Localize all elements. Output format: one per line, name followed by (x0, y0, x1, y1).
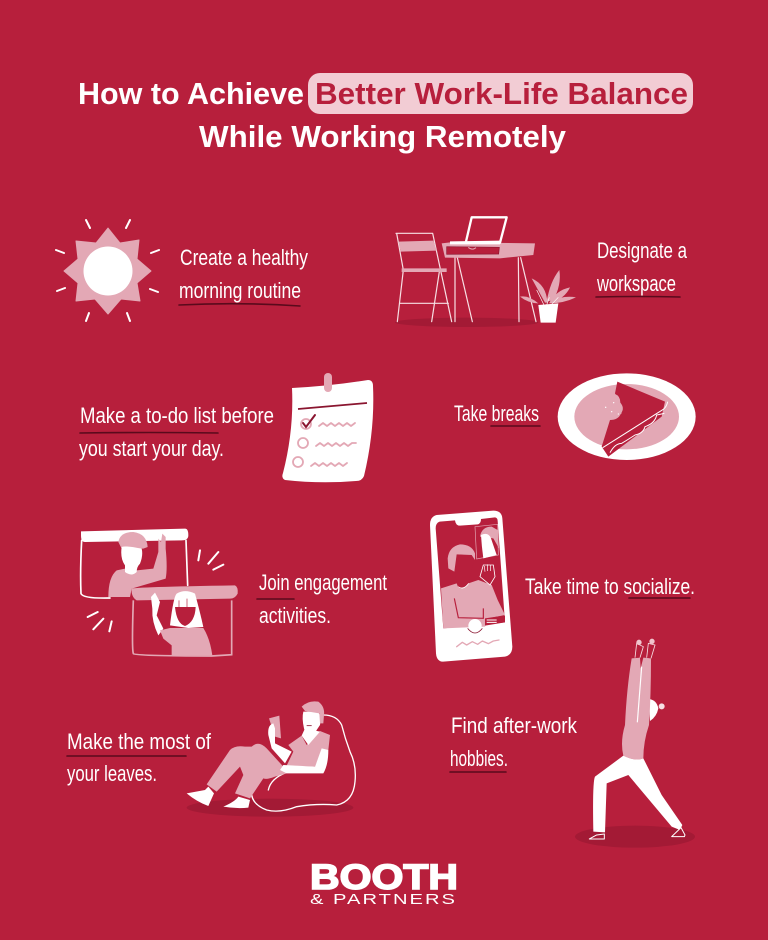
title highlight (308, 73, 693, 114)
text: morning routine: Create a healthy (180, 245, 308, 270)
title: How to Achieve (78, 76, 304, 111)
text: to-do list: Make a to-do list before (80, 403, 274, 428)
icon: sun (56, 220, 159, 321)
text: leaves (67, 729, 212, 786)
text: engagement (257, 570, 387, 628)
text: hobbies: Find after-work (451, 713, 578, 738)
title: While Working Remotely (199, 119, 567, 154)
logo (310, 858, 458, 908)
icon: video call windows (81, 529, 238, 656)
text: to-do list: you start your day. (79, 436, 224, 461)
title (78, 73, 693, 154)
icon: phone video call (430, 511, 512, 662)
logo: BOOTH (310, 858, 458, 897)
text: take breaks: Take breaks (454, 401, 539, 426)
text: engagement: activities. (259, 603, 331, 628)
text: socialize: Take time to socialize. (525, 574, 695, 599)
text: morning routine: morning routine (179, 278, 301, 303)
icon: plate with cake slice (558, 373, 696, 460)
text: workspace (596, 238, 688, 297)
icon: desk, chair, laptop and plant (395, 217, 576, 327)
icon: person on beanbag (187, 701, 355, 817)
text: workspace: workspace (596, 271, 676, 296)
logo: & PARTNERS (310, 891, 457, 908)
text: engagement: Join engagement (259, 570, 387, 595)
text: hobbies (450, 713, 578, 772)
title: Better Work-Life Balance (315, 76, 688, 111)
text: leaves: your leaves. (67, 761, 157, 786)
text: leaves: Make the most of (67, 729, 212, 754)
text: workspace: Designate a (597, 238, 688, 263)
icon: yoga figure (575, 639, 695, 848)
icon: checklist (282, 373, 373, 482)
text: morning routine (179, 245, 308, 306)
text: to-do list (79, 403, 274, 461)
text: hobbies: hobbies. (450, 746, 508, 771)
